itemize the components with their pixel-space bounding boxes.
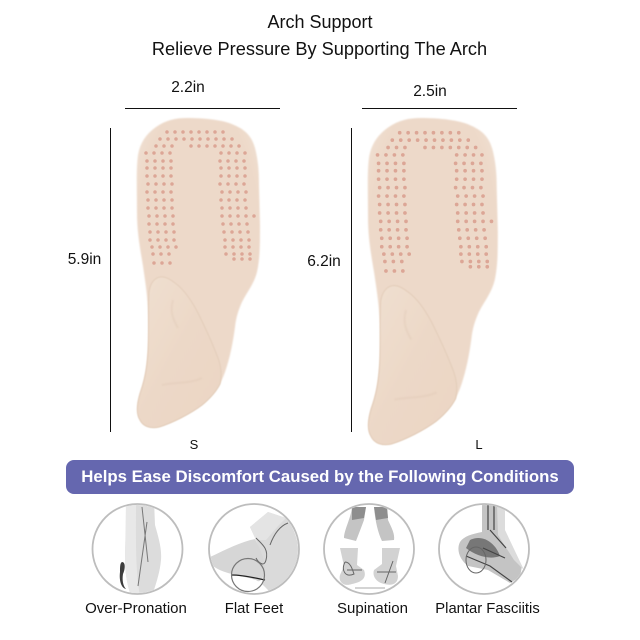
arch pad	[137, 277, 221, 428]
width label large: 2.5in	[413, 83, 447, 100]
banner	[66, 460, 574, 494]
height label large: 6.2in	[307, 253, 341, 270]
icon: over-pronation	[92, 500, 182, 596]
label: flat feet: Flat Feet	[225, 601, 283, 617]
subtitle: Relieve Pressure By Supporting The Arch	[152, 39, 487, 59]
height line small	[110, 128, 112, 432]
insole small	[137, 118, 260, 428]
icon: plantar fasciitis	[439, 504, 529, 594]
banner text: Helps Ease Discomfort Caused by the Following Conditions	[81, 467, 559, 486]
label: over-pronation: Over-Pronation	[85, 600, 187, 617]
label: plantar fasciitis: Plantar Fasciitis	[435, 601, 540, 617]
label: supination: Supination	[337, 600, 408, 617]
label S: S	[190, 437, 199, 452]
icon: flat feet	[208, 504, 299, 594]
height line large	[350, 128, 352, 432]
insole large	[368, 118, 498, 445]
width label small: 2.2in	[171, 79, 205, 96]
height label small: 5.9in	[68, 251, 101, 268]
title: Arch Support	[267, 12, 373, 32]
dots	[146, 132, 255, 263]
width line large	[362, 108, 517, 110]
arch pad shading	[162, 300, 202, 385]
label L: L	[475, 437, 483, 452]
width line small	[125, 108, 280, 110]
icon: supination	[324, 504, 414, 594]
